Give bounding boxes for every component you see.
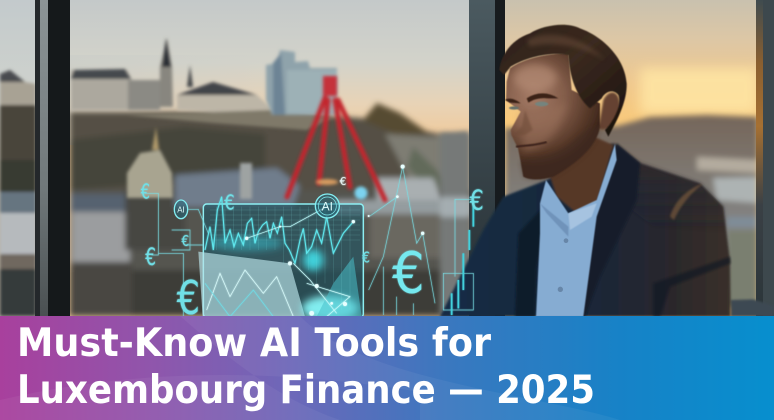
nose shadow (513, 110, 533, 135)
forehead highlight (513, 65, 557, 92)
candles (452, 200, 473, 315)
neck (550, 133, 613, 213)
cheek highlight (520, 103, 567, 152)
hair (499, 25, 627, 137)
red bridge (287, 76, 385, 200)
icon: AI badge small: AI (177, 205, 185, 214)
face (506, 53, 600, 179)
icons: euro symbols: € (340, 175, 347, 188)
office tower (266, 50, 337, 115)
price lines (205, 197, 353, 263)
castle buildings (71, 38, 333, 199)
jacket shoulder seam (670, 183, 703, 220)
grid (210, 207, 360, 310)
circuit connectors (145, 167, 473, 317)
banner: gradient title bar (0, 316, 774, 420)
title: Must-Know AI Tools for (17, 320, 491, 366)
icons: euro symbols: € (470, 183, 484, 216)
title: Luxembourg Finance — 2025 (17, 367, 595, 413)
brows (505, 99, 521, 103)
panel: sky through the windows (0, 0, 759, 316)
icons: euro symbols: € (392, 240, 425, 306)
eyes (509, 106, 519, 110)
icons: euro symbols: € (181, 233, 189, 250)
shirt (536, 144, 617, 317)
panel: window frames (35, 0, 774, 316)
ear (598, 92, 620, 130)
title (17, 320, 595, 413)
icons: euro symbols: € (362, 249, 370, 267)
banner: faint background shapes (0, 316, 620, 420)
glow cluster (210, 236, 358, 321)
jacket (440, 143, 731, 317)
icons: euro symbols: € (177, 271, 200, 325)
left pane (0, 70, 36, 316)
icons: euro symbols: € (145, 243, 156, 271)
chart: holographic AI finance dashboard (141, 165, 484, 325)
icons: euro symbols: € (224, 192, 235, 215)
center hillside (70, 103, 470, 316)
icon: AI badge large (315, 194, 339, 218)
icon: AI badge large: AI (322, 199, 333, 213)
icons: euro symbols: € (141, 180, 150, 204)
panel: blurred Luxembourg cityscape (0, 38, 470, 316)
dashboard panel (203, 204, 363, 317)
panel: man in a dark blazer (440, 25, 774, 317)
hair highlights (527, 35, 605, 60)
icons: euro symbols (141, 175, 484, 325)
mouth (516, 142, 547, 147)
beard shadow (521, 127, 600, 179)
icon: AI badge small (174, 200, 188, 219)
panel: right-pane sunset skyline (440, 115, 758, 316)
chair back (731, 299, 774, 317)
nodes (245, 165, 424, 316)
